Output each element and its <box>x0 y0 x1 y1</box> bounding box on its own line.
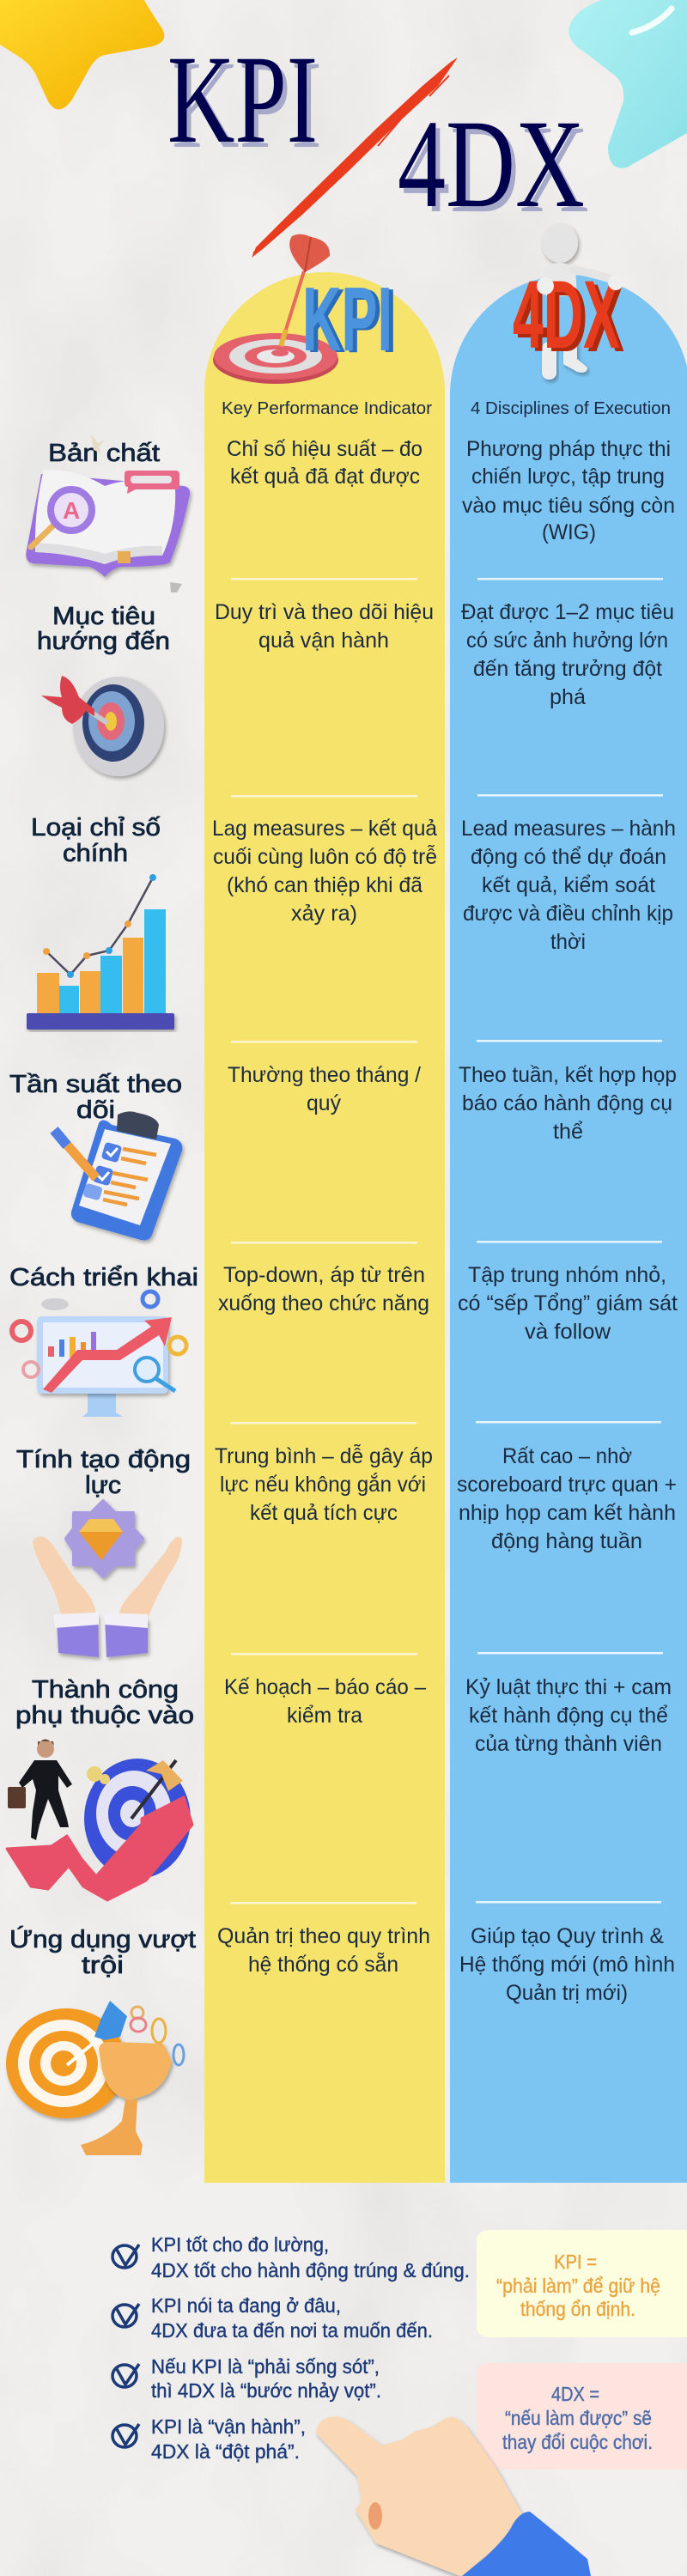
row 8 KPI text: hệ thống có sẵn <box>248 1952 398 1977</box>
row heading: Mục tiêu hướng đến <box>37 603 170 655</box>
row 3 4DX text: Lead measures – hành <box>461 817 676 841</box>
row 5 KPI text <box>218 1263 429 1315</box>
row 6 KPI text <box>215 1443 433 1525</box>
row 4 4DX text: Theo tuần, kết hợp họp <box>459 1063 677 1087</box>
row 7 4DX text: của từng thành viên <box>475 1732 662 1756</box>
row 8 KPI text: Quản trị theo quy trình <box>217 1924 430 1948</box>
row heading: Ứng dụng vượt trội: Ứng dụng vượt <box>9 1925 196 1953</box>
row 6 4DX text: scoreboard trực quan + <box>457 1473 677 1497</box>
row 5 KPI text: Top-down, áp từ trên <box>223 1263 425 1287</box>
icon: bar chart <box>27 874 174 1030</box>
takeaway 1: 4DX tốt cho hành động trúng & đúng. <box>151 2259 470 2281</box>
row heading: Thành công phụ thuộc vào <box>15 1676 194 1729</box>
row 3 KPI text: xảy ra) <box>291 902 357 926</box>
icon: clipboard <box>54 1111 182 1240</box>
row 3 4DX text: động có thể dự đoán <box>471 845 666 869</box>
row 6 4DX text: Rất cao – nhờ <box>502 1444 632 1468</box>
row 4 4DX text <box>459 1063 677 1144</box>
takeaway 2: KPI nói ta đang ở đâu, <box>151 2294 341 2317</box>
row 6 KPI text: Trung bình – dễ gây áp <box>215 1443 433 1468</box>
row 6 4DX text: nhịp họp cam kết hành <box>459 1501 676 1525</box>
row heading: Thành công phụ thuộc vào: Thành công <box>32 1676 179 1704</box>
row 5 KPI text: xuống theo chức năng <box>218 1291 429 1315</box>
row heading: Ứng dụng vượt trội: trội <box>82 1952 124 1979</box>
row 4 4DX text: báo cáo hành động cụ <box>462 1091 672 1115</box>
row 1 4DX text: (WIG) <box>542 520 596 544</box>
row 3 4DX text: được và điều chỉnh kịp <box>463 902 673 926</box>
row 1 KPI text: kết quả đã đạt được <box>230 465 420 489</box>
row 5 4DX text: Tập trung nhóm nhỏ, <box>468 1263 666 1287</box>
title: KPI: KPI <box>167 29 318 169</box>
row 5 4DX text: có “sếp Tổng” giám sát <box>458 1291 678 1315</box>
icon: dartboard <box>41 676 164 776</box>
row heading: Loại chỉ số chính: Loại chỉ số <box>31 814 161 841</box>
row heading: Mục tiêu hướng đến: hướng đến <box>37 628 170 655</box>
row 3 KPI text <box>212 817 437 926</box>
row heading: Ứng dụng vượt trội <box>9 1925 196 1979</box>
icon: businessman and target <box>7 1740 192 1900</box>
takeaway 4: 4DX là “đột phá”. <box>151 2440 300 2463</box>
row 1 KPI text: Chỉ số hiệu suất – đo <box>227 437 423 461</box>
takeaway 4: KPI là “vận hành”, <box>151 2415 306 2438</box>
row 2 KPI text: Duy trì và theo dõi hiệu <box>215 600 434 624</box>
icon: 4DX figure <box>513 223 623 380</box>
row 3 KPI text: Lag measures – kết quả <box>212 817 437 841</box>
row 2 4DX text: có sức ảnh hưởng lớn <box>466 629 668 653</box>
callout: 4DX: “nếu làm được” sẽ <box>505 2407 652 2429</box>
icon: KPI dart and target: KPI <box>302 269 392 370</box>
panel: KPI column <box>204 272 445 2183</box>
takeaway 3 <box>112 2355 381 2402</box>
takeaway 2 <box>112 2294 433 2342</box>
row heading: Tần suất theo dõi: Tần suất theo <box>9 1071 182 1098</box>
row 2 KPI text <box>215 600 434 653</box>
row 1 4DX text: Phương pháp thực thi <box>466 437 671 461</box>
row 2 4DX text <box>461 600 674 709</box>
row 4 KPI text: quý <box>307 1091 341 1115</box>
takeaway 1 <box>112 2233 470 2281</box>
takeaway 2: 4DX đưa ta đến nơi ta muốn đến. <box>151 2319 433 2342</box>
icon: target and trophy <box>6 2001 184 2155</box>
row 8 4DX text: Hệ thống mới (mô hình <box>459 1953 675 1977</box>
row 4 KPI text: Thường theo tháng / <box>228 1063 421 1087</box>
row 6 KPI text: kết quả tích cực <box>250 1501 398 1525</box>
row 7 KPI text <box>224 1675 426 1728</box>
row 8 4DX text: Giúp tạo Quy trình & <box>471 1924 664 1948</box>
row 7 KPI text: Kế hoạch – báo cáo – <box>224 1675 426 1699</box>
icon: monitor with growth arrow <box>12 1291 186 1417</box>
icon: pointing hand <box>318 2418 591 2576</box>
row 2 4DX text: đến tăng trưởng đột <box>473 657 662 681</box>
row 7 4DX text <box>465 1675 672 1756</box>
row 3 KPI text: (khó can thiệp khi đã <box>227 873 423 897</box>
row heading: Mục tiêu hướng đến: Mục tiêu <box>52 603 155 630</box>
row 6 KPI text: lực nếu không gắn với <box>220 1472 426 1497</box>
row 3 4DX text <box>461 817 676 954</box>
subtitle: 4DX: 4 Disciplines of Execution <box>471 399 671 418</box>
row heading: Cách triển khai: Cách triển khai <box>9 1264 198 1291</box>
row 8 4DX text <box>459 1924 675 2005</box>
row heading: Loại chỉ số chính: chính <box>63 840 128 867</box>
row 3 KPI text: cuối cùng luôn có độ trễ <box>213 844 437 869</box>
callout: 4DX: 4DX = <box>551 2383 599 2405</box>
row 6 4DX text <box>457 1444 677 1553</box>
callout: KPI: KPI = <box>554 2251 597 2273</box>
takeaway 3: Nếu KPI là “phải sống sót”, <box>151 2355 380 2378</box>
row 6 4DX text: động hàng tuần <box>491 1529 642 1553</box>
callout: 4DX <box>477 2363 687 2470</box>
row 7 4DX text: kết hành động cụ thể <box>469 1704 668 1728</box>
row 1 4DX text <box>462 437 675 544</box>
callout: KPI: thống ổn định. <box>520 2298 635 2320</box>
callout: KPI: “phải làm” để giữ hệ <box>496 2275 660 2297</box>
callout: 4DX: thay đổi cuộc chơi. <box>502 2431 653 2453</box>
row 8 KPI text <box>217 1924 430 1977</box>
takeaway 4 <box>112 2415 306 2463</box>
row 2 KPI text: quả vận hành <box>258 629 389 653</box>
row 5 4DX text: và follow <box>525 1320 611 1344</box>
row 1 4DX text: vào mục tiêu sống còn <box>462 494 675 518</box>
row 1 4DX text: chiến lược, tập trung <box>471 465 665 489</box>
row 2 4DX text: phá <box>550 685 586 709</box>
row 5 4DX text <box>458 1263 678 1344</box>
row heading: Tính tạo động lực <box>16 1446 191 1499</box>
takeaway 1: KPI tốt cho đo lường, <box>151 2233 329 2256</box>
row heading: Bản chất: Bản chất <box>48 440 160 467</box>
row 8 4DX text: Quản trị mới) <box>506 1981 628 2005</box>
callout: KPI <box>477 2230 687 2337</box>
row 4 KPI text <box>228 1063 421 1115</box>
row 7 4DX text: Kỷ luật thực thi + cam <box>465 1675 672 1699</box>
icon: book: A <box>63 497 80 524</box>
row 1 KPI text <box>227 437 423 489</box>
row heading: Tần suất theo dõi: dõi <box>76 1097 115 1124</box>
row heading: Loại chỉ số chính <box>31 814 161 867</box>
row heading: Tính tạo động lực: lực <box>85 1472 121 1499</box>
row heading: Tính tạo động lực: Tính tạo động <box>16 1446 191 1473</box>
icon: hands holding gem <box>33 1501 182 1657</box>
row 3 4DX text: kết quả, kiểm soát <box>482 873 655 897</box>
subtitle: KPI: Key Performance Indicator <box>222 399 432 418</box>
icon: KPI dart and target <box>213 234 392 384</box>
row heading: Thành công phụ thuộc vào: phụ thuộc vào <box>15 1702 194 1729</box>
icon: cyan star <box>568 0 687 168</box>
red brush slash <box>252 58 458 258</box>
row 3 4DX text: thời <box>550 930 586 954</box>
row heading: Tần suất theo dõi <box>9 1071 182 1124</box>
takeaway 3: thì 4DX là “bước nhảy vọt”. <box>151 2379 381 2402</box>
row 2 4DX text: Đạt được 1–2 mục tiêu <box>461 600 674 624</box>
panel: 4DX column <box>450 275 687 2183</box>
icon: yellow star <box>0 0 164 110</box>
title: 4DX: 4DX <box>398 94 585 234</box>
row 7 KPI text: kiểm tra <box>287 1704 362 1728</box>
row 4 4DX text: thể <box>553 1120 583 1144</box>
icon: book <box>26 434 190 592</box>
